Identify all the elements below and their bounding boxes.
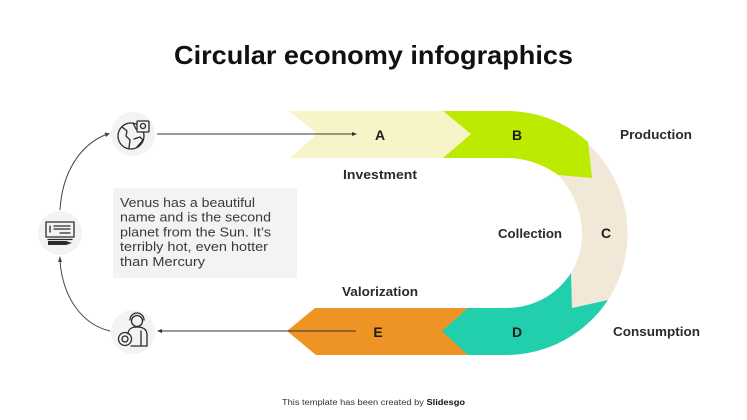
circular flow diagram: [287, 111, 628, 355]
footer credit: This template has been created by Slidesgo: [282, 398, 465, 407]
segment B: production: [443, 111, 592, 178]
letter E: E: [373, 324, 383, 340]
segment A: investment: [289, 111, 471, 158]
label: Investment: Investment: [343, 167, 418, 182]
icon: globe with badge: [111, 112, 155, 156]
text block: Venus description: than Mercury: [120, 254, 206, 269]
text block: Venus description: planet from the Sun. It’s: [120, 224, 272, 240]
segment E: valorization: [287, 308, 470, 355]
letter C: C: [601, 225, 611, 241]
arrow: card to globe: [60, 132, 110, 210]
text block: Venus description: Venus has a beautiful: [120, 195, 255, 210]
arrow: person to card: [58, 256, 110, 331]
icon: cheque and pen: [38, 211, 82, 255]
label: Valorization: Valorization: [342, 284, 418, 299]
arrow: globe to A: [157, 132, 357, 136]
letter A: A: [375, 127, 385, 143]
segment D: consumption: [442, 273, 608, 355]
label: Collection: Collection: [498, 226, 562, 241]
label: Consumption: Consumption: [613, 324, 700, 339]
arrow: E to person: [157, 329, 356, 333]
icon: person with phone: [111, 310, 155, 354]
label: Production: Production: [620, 127, 692, 142]
title: Circular economy infographics: [174, 40, 573, 70]
letter B: B: [512, 127, 522, 143]
text block: Venus description: [113, 188, 297, 278]
letter D: D: [512, 324, 522, 340]
text block: Venus description: terribly hot, even hotter: [120, 239, 269, 254]
segment C: collection: [556, 142, 628, 308]
text block: Venus description: name and is the second: [120, 210, 271, 224]
